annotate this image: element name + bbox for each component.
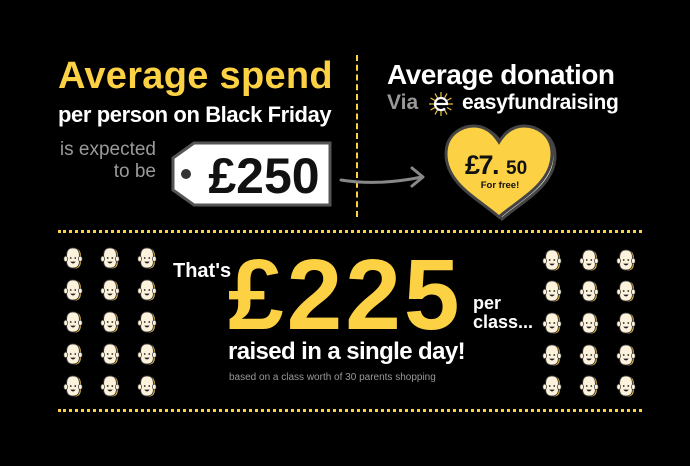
heading: average donation: Average donation <box>387 59 614 90</box>
text: per class <box>473 293 533 332</box>
divider: top dotted <box>58 230 642 236</box>
text: per class: per <box>473 293 501 313</box>
divider: bottom dotted <box>58 409 642 415</box>
heart: £7.50 for free: 50 <box>506 158 527 179</box>
faces: left group <box>64 248 156 396</box>
subheading: per person on Black Friday: per person on Black Friday <box>58 102 331 127</box>
text: via easyfundraising <box>387 91 619 116</box>
heart: £7.50 for free: For free! <box>481 180 519 191</box>
divider: vertical dashed <box>356 55 358 217</box>
heart: £7.50 for free: £7. <box>465 150 498 180</box>
heart: £7.50 for free <box>444 124 556 221</box>
arrow <box>340 166 425 188</box>
text: is expected to be: to be <box>114 161 156 182</box>
faces: right group <box>542 250 636 396</box>
price tag £250 <box>172 142 332 206</box>
heading: average spend: Average spend <box>58 55 333 97</box>
text: raised in a single day: raised in a single day! <box>228 338 465 365</box>
text: per class: class... <box>473 312 533 332</box>
big number: £225: £225 <box>228 239 462 351</box>
text: via easyfundraising: easyfundraising <box>462 91 619 114</box>
footnote: based on a class worth of 30 parents shopping <box>229 372 436 383</box>
text: via easyfundraising: Via <box>387 91 418 114</box>
text: that's: That's <box>173 260 231 282</box>
price tag £250: £250 <box>208 148 320 204</box>
text: is expected to be <box>60 139 156 182</box>
icon: easyfundraising logo <box>429 92 453 116</box>
text: is expected to be: is expected <box>60 139 156 160</box>
